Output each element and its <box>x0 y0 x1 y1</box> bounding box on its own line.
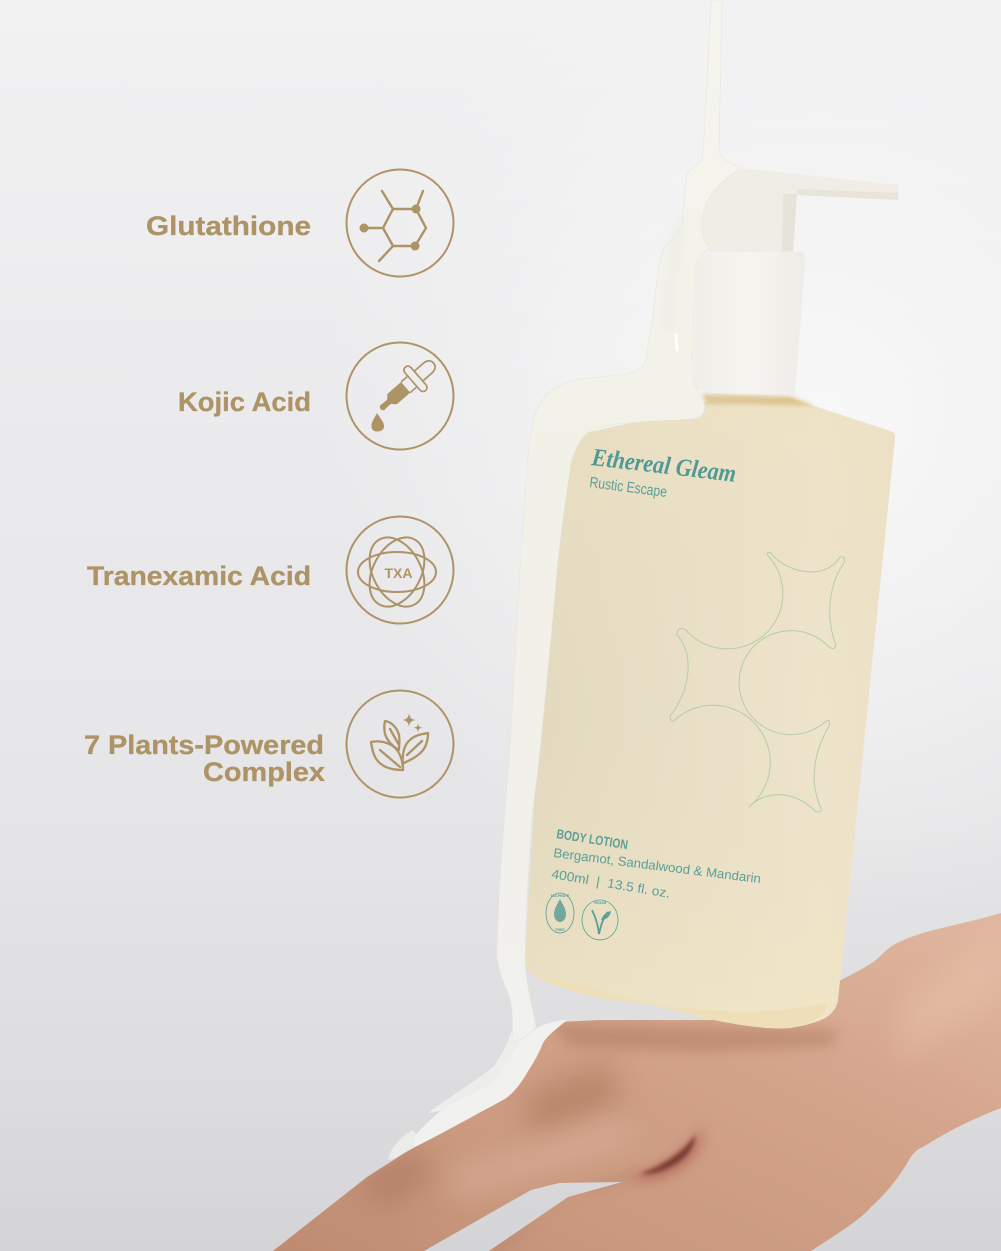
label: Tranexamic Acid: Tranexamic Acid <box>87 561 311 591</box>
ingredient: Tranexamic Acid <box>87 516 454 624</box>
badge: sulphate free: SULPHATE <box>551 894 570 898</box>
hand and fingers shape <box>270 900 1001 1251</box>
icon: plant with sparkles <box>346 690 454 798</box>
product type: BODY LOTION <box>556 826 629 852</box>
badge: vegan <box>582 900 618 940</box>
icon: molecule <box>346 170 454 276</box>
ingredient: Kojic Acid <box>178 342 454 450</box>
star emblem <box>670 553 844 812</box>
shoulder shadow <box>702 394 815 406</box>
badge: vegan: VEGAN <box>594 901 607 905</box>
label: 7 Plants-Powered Complex <box>84 730 325 787</box>
bottle base band <box>530 973 827 1028</box>
ingredient: 7 Plants-Powered Complex <box>84 690 454 798</box>
label: 7 Plants-Powered Complex: 7 Plants-Powered <box>84 730 324 760</box>
pump collar <box>693 252 805 395</box>
badge: sulphate free: FREE <box>555 928 565 932</box>
badge: sulphate free <box>546 893 574 933</box>
pump nozzle <box>701 169 898 252</box>
pump <box>693 169 898 395</box>
product name: Ethereal Gleam <box>589 444 737 488</box>
volume: 400ml | 13.5 fl. oz. <box>551 866 671 901</box>
label: Kojic Acid: Kojic Acid <box>178 387 311 417</box>
scent name: Rustic Escape <box>588 474 668 501</box>
bottle <box>525 394 895 1028</box>
bottle body <box>525 398 895 1028</box>
icon: atom TXA <box>346 516 454 624</box>
milk stream and coating <box>497 0 742 1040</box>
ingredient: Glutathione <box>146 170 454 276</box>
scent notes: Bergamot, Sandalwood & Mandarin <box>553 845 762 886</box>
icon: atom TXA: TXA <box>384 565 412 581</box>
icon: dropper <box>346 342 454 450</box>
milk drip on hand <box>388 1020 567 1160</box>
hand <box>270 900 1001 1251</box>
label: 7 Plants-Powered Complex: Complex <box>203 757 325 787</box>
label: Glutathione: Glutathione <box>146 211 311 241</box>
